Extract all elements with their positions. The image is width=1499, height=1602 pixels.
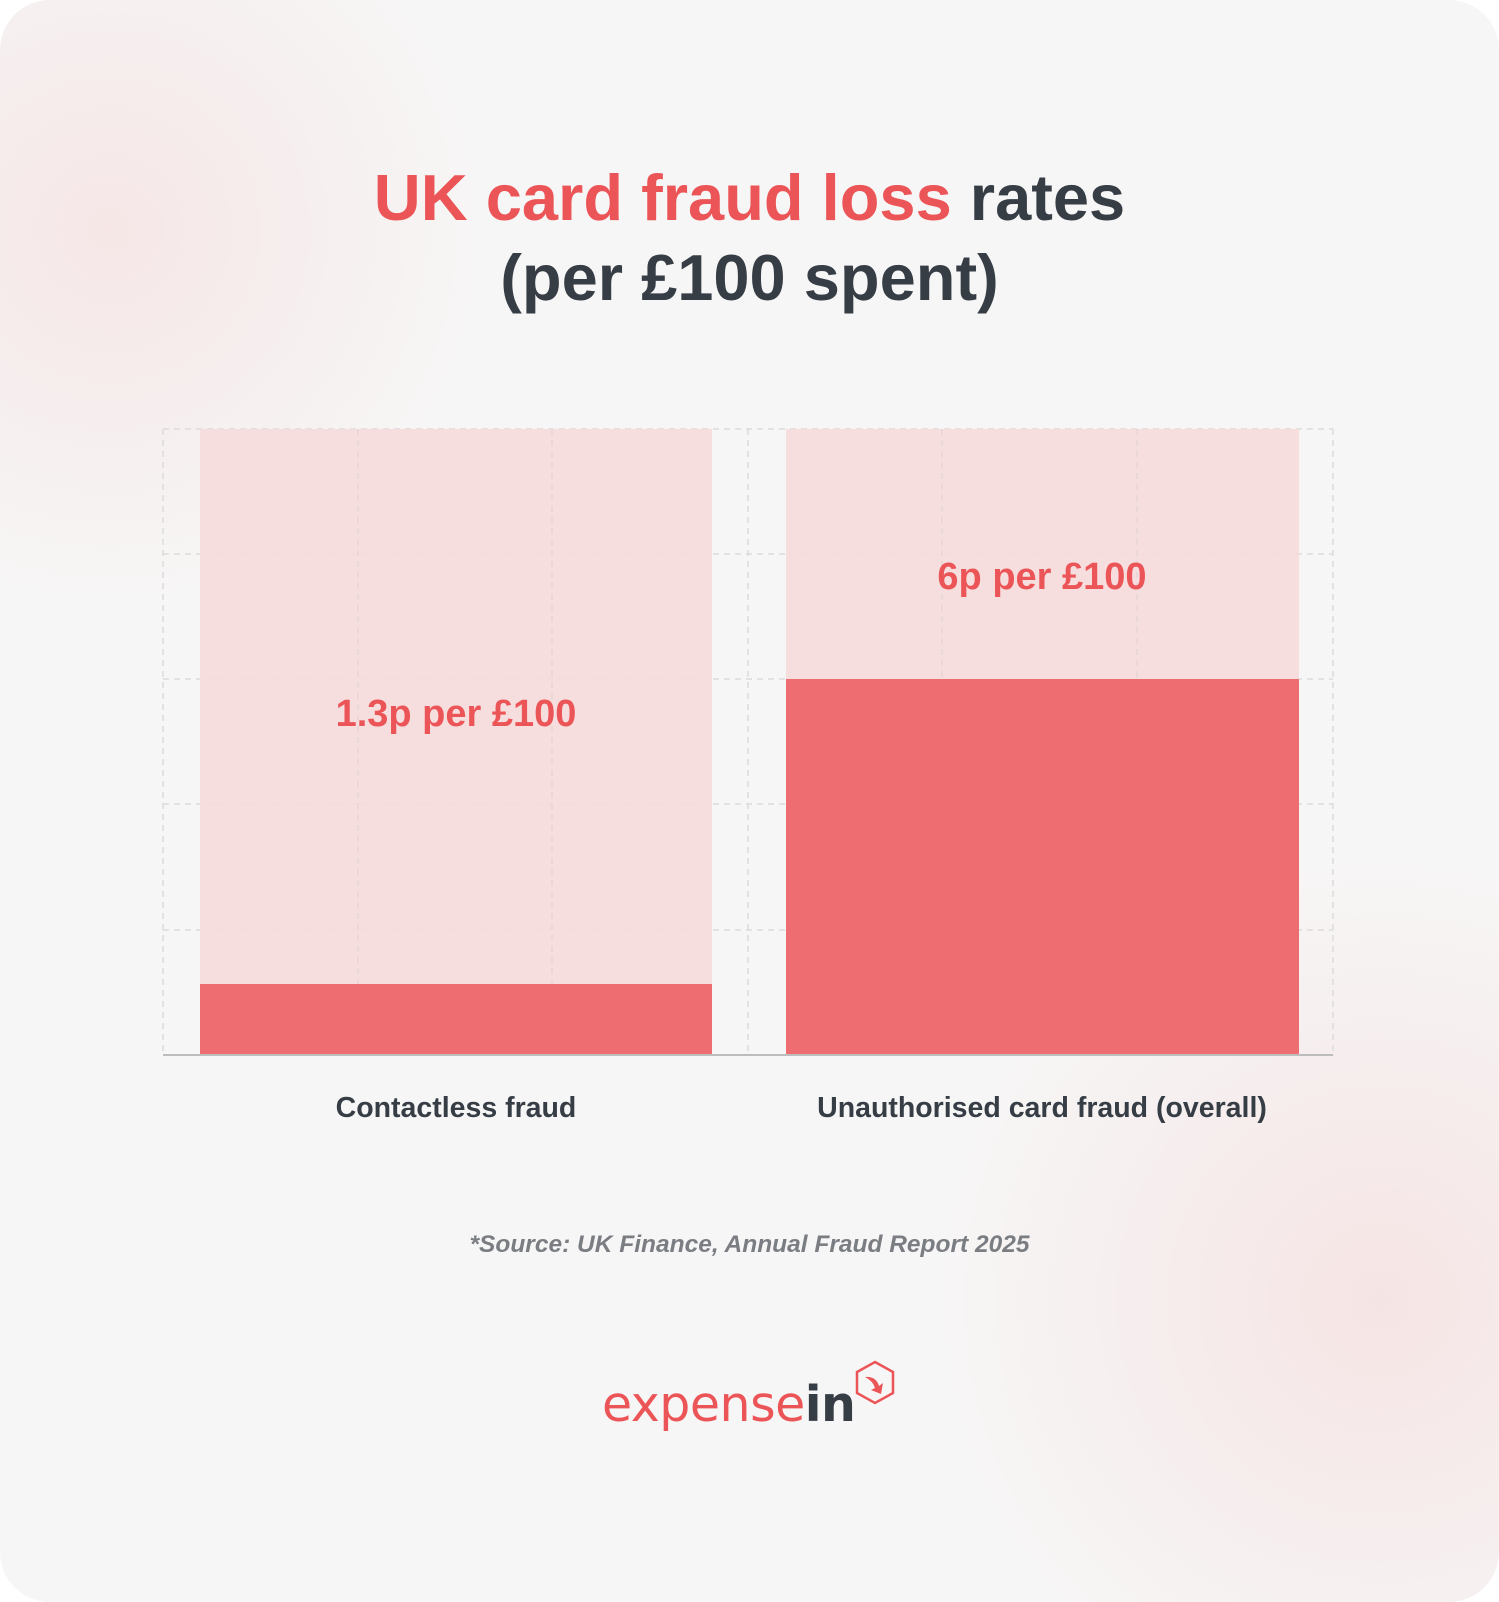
category labels — [336, 1092, 1267, 1124]
source note: *Source: UK Finance, Annual Fraud Report 2025 — [470, 1231, 1029, 1258]
title — [374, 161, 1125, 314]
logo: expensein — [602, 1376, 855, 1433]
value label: contactless: 1.3p per £100 — [336, 693, 576, 735]
icon: hexagon arrow — [856, 1360, 894, 1404]
bar: unauthorised — [786, 429, 1299, 1054]
title: (per £100 spent) — [500, 241, 999, 314]
value label: unauthorised: 6p per £100 — [937, 556, 1147, 598]
logo — [602, 1360, 894, 1433]
bar: contactless — [200, 429, 712, 1054]
category labels: Unauthorised card fraud (overall) — [817, 1092, 1267, 1124]
category labels: Contactless fraud — [336, 1092, 576, 1124]
title: UK card fraud loss rates — [374, 161, 1125, 234]
